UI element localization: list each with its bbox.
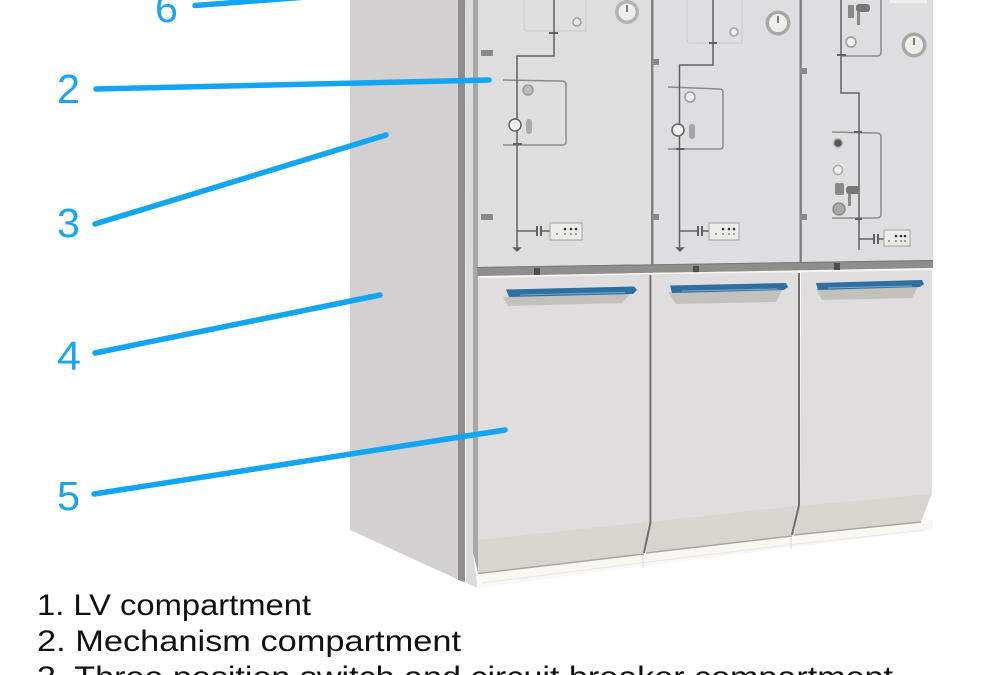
leader line 4 (95, 295, 380, 353)
upper panel 2 (653, 0, 800, 265)
leader line 3 (95, 135, 386, 224)
gauge panel 2 (766, 10, 790, 36)
callout 5 (57, 430, 505, 519)
callout 3 (57, 135, 386, 246)
mimic diagram panel 2 (668, 0, 742, 251)
front corner strip (458, 0, 478, 588)
legend list (37, 589, 894, 675)
callout 2 (57, 66, 489, 112)
upper panel 1 (478, 0, 652, 267)
number 3: 3 (57, 200, 80, 246)
legend item 2: 2. Mechanism compartment (37, 625, 462, 658)
door handle 1 (503, 286, 637, 306)
number 4: 4 (57, 333, 81, 379)
door handle 2 (668, 283, 788, 304)
lower door 1 (478, 273, 650, 574)
plinth (477, 520, 933, 588)
number 2: 2 (57, 66, 80, 112)
upper panel 3 (802, 0, 933, 262)
test socket panel 3 (884, 230, 910, 246)
number 5: 5 (57, 473, 80, 519)
door handle 3 (816, 280, 924, 300)
mimic diagram panel 1 (503, 0, 586, 251)
test socket panel 1 (550, 223, 582, 240)
leader line 5 (94, 430, 505, 494)
key switches panel 3 (835, 4, 870, 206)
lower door 3 (794, 269, 932, 535)
gauge panel 3 (902, 32, 926, 58)
switchgear cabinet (350, 0, 933, 588)
leader line 2 (96, 80, 489, 89)
side panel (350, 0, 459, 580)
hinges (481, 50, 807, 220)
horizontal band (477, 260, 933, 276)
lower door 2 (646, 271, 798, 553)
legend item 1: 1. LV compartment (37, 589, 312, 622)
door seams (644, 273, 799, 553)
callout 4 (57, 295, 380, 379)
top right label plate (890, 0, 927, 3)
panel seams (651, 0, 802, 266)
test socket panel 2 (709, 223, 739, 240)
callout 6 (155, 0, 300, 31)
leader line 6 (195, 0, 300, 6)
gauge panel 1 (615, 0, 639, 24)
mimic diagram panel 3 (832, 0, 884, 250)
